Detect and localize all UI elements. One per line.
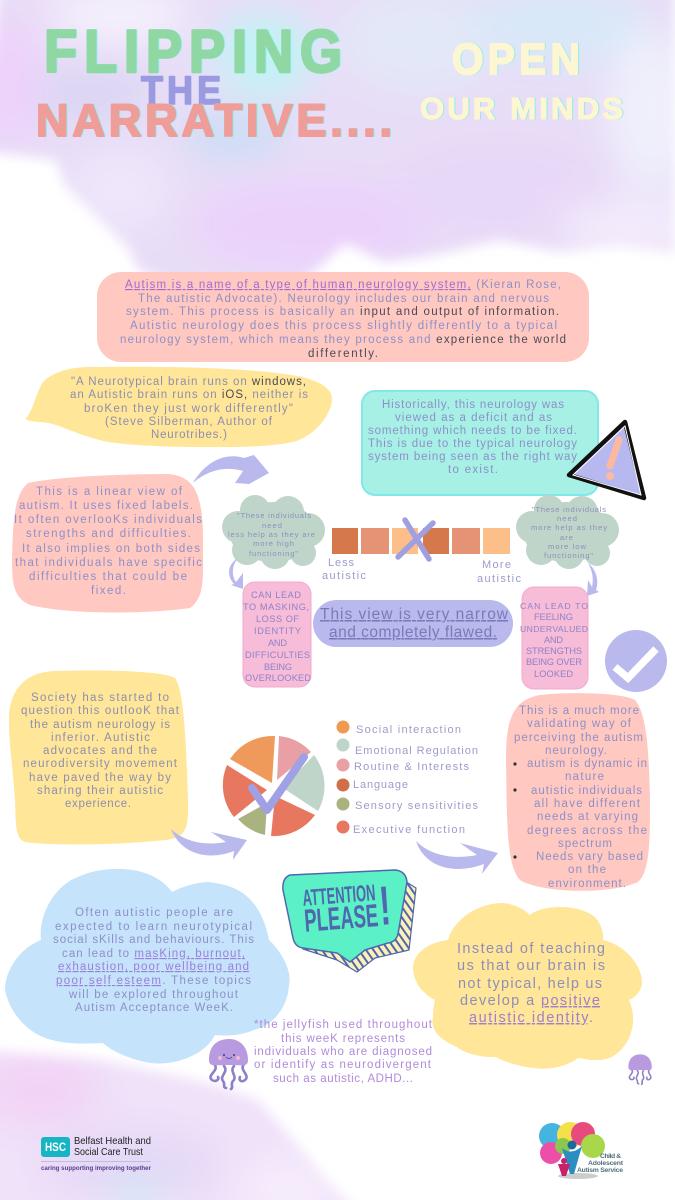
cloud: more help quote: functioning" <box>544 551 593 560</box>
text: jellyfish note: this weeK represents <box>281 1033 405 1045</box>
panel: masking outcome: AND <box>268 638 287 648</box>
label: more autistic <box>477 559 522 585</box>
panel: positive autistic identity: autistic identity. <box>469 1010 593 1026</box>
label: less autistic <box>322 557 366 582</box>
arrow: quote to linear view <box>193 455 269 484</box>
panel: autism definition: The autistic Advocate). Neurology includes our brain and nervous <box>138 293 549 305</box>
panel: undervalued outcome: BEING OVER <box>526 657 582 667</box>
panel: autistic people expected to mask: social sKills and behaviours. This <box>53 934 254 946</box>
panel: quote speech bubble: "A Neurotypical brain runs on windows, <box>71 376 306 388</box>
panel: masking outcome: LOSS OF <box>256 614 299 624</box>
panel: positive autistic identity: develop a positive <box>460 993 600 1009</box>
panel: linear view of autism: autism. It uses fixed labels. <box>19 500 193 512</box>
cloud: less help quote: "These individuals <box>237 511 311 520</box>
cloud: less help quote: need <box>262 521 282 530</box>
panel: validating view: perceiving the autism <box>514 732 643 744</box>
panel: masking outcome: CAN LEAD <box>251 590 301 600</box>
panel: validating view: spectrum <box>558 838 612 850</box>
panel: historical deficit view: to exist. <box>448 464 498 476</box>
subtitle: open our minds <box>420 34 623 126</box>
logo: Child and Adolescent Autism Service <box>539 1122 624 1179</box>
panel: society questions outlook: experience. <box>65 798 131 810</box>
icon: large jellyfish <box>209 1039 248 1089</box>
logo: Child and Adolescent Autism Service: Child & <box>600 1153 621 1160</box>
panel: society questions outlook: neurodiversity movement <box>23 758 178 770</box>
arrow: right cloud to undervalued <box>587 563 599 596</box>
panel: undervalued outcome: UNDERVALUED <box>520 624 588 634</box>
panel: autism definition: Autistic neurology does this process slightly differently to a typical <box>130 320 557 332</box>
logo: Belfast Health and Social Care Trust <box>41 1135 152 1172</box>
label: less autistic: autistic <box>322 570 366 582</box>
panel: society questions outlook: question this outlooK that <box>21 705 180 717</box>
icon: attention please speech bubble <box>283 870 416 972</box>
attention please wording <box>301 874 393 943</box>
panel: autistic people expected to mask <box>5 869 290 1063</box>
panel: validating view: autistic individuals <box>531 785 642 797</box>
logo: Belfast Health and Social Care Trust: HSC <box>45 1142 66 1154</box>
label: more autistic: autistic <box>477 573 522 585</box>
icon: small jellyfish <box>628 1054 652 1084</box>
panel: validating view: autism is dynamic in <box>527 758 647 770</box>
callout: narrow and flawed view: This view is very narrow <box>320 606 509 623</box>
attention please wording: ! <box>377 874 393 937</box>
legend: autism domains: Emotional Regulation <box>355 745 478 757</box>
legend: autism domains: Language <box>353 779 408 791</box>
panel: society questions outlook: the autism neurology is <box>30 719 170 731</box>
panel: masking outcome <box>243 582 311 687</box>
panel: linear view of autism: strengths and difficulties. <box>26 528 191 540</box>
logo: Child and Adolescent Autism Service: Adolescent <box>588 1160 624 1167</box>
bubble body <box>283 870 407 962</box>
panel: validating view: validating way of <box>527 718 632 730</box>
panel: linear view of autism <box>12 474 203 613</box>
arrow: legend to validating panel <box>416 841 498 874</box>
icon: pie check mark <box>252 757 304 810</box>
panel: linear view of autism: that individuals have specific <box>15 557 202 569</box>
cloud: less help quote <box>222 495 325 569</box>
panel: validating view: degrees across the <box>527 825 647 837</box>
panel: validating view: environment. <box>548 878 626 890</box>
panel: positive autistic identity: Instead of teaching <box>457 941 605 957</box>
text: jellyfish note: individuals who are diagnosed <box>254 1046 432 1058</box>
panel: validating view: on the <box>568 864 606 876</box>
panel: quote speech bubble: an Autistic brain runs on iOS, neither is <box>70 389 308 401</box>
cloud: more help quote <box>516 495 619 569</box>
panel: autism definition: Autism is a name of a type of human neurology system, (Kieran Rose, <box>125 279 561 291</box>
legend: autism domains: Executive function <box>353 824 465 836</box>
panel: validating view: nature <box>565 771 604 783</box>
logo: Child and Adolescent Autism Service: Autism Service <box>577 1167 623 1174</box>
logo: Belfast Health and Social Care Trust: Belfast Health and <box>74 1135 151 1147</box>
cloud: less help quote: more high <box>253 539 294 548</box>
panel: autistic people expected to mask: Autism Acceptance WeeK. <box>75 1002 233 1014</box>
panel: linear view of autism: It often overlooKs individuals <box>14 514 202 526</box>
legend: autism domains: Sensory sensitivities <box>355 800 478 812</box>
panel: society questions outlook: advocates and the <box>43 745 157 757</box>
panel: validating view: Needs vary based <box>536 851 643 863</box>
panel: autistic people expected to mask: Often autistic people are <box>75 907 233 919</box>
panel: masking outcome: OVERLOOKED <box>245 673 311 683</box>
panel: society questions outlook: have paved the way by <box>29 772 171 784</box>
panel: undervalued outcome <box>520 587 588 689</box>
panel: historical deficit view: something which needs to be fixed. <box>368 425 577 437</box>
attention please wording: PLEASE <box>303 897 380 939</box>
text: jellyfish note: such as autistic, ADHD... <box>273 1073 413 1085</box>
panel: masking outcome: DIFFICULTIES <box>245 650 310 660</box>
label: more autistic: More <box>482 559 511 571</box>
panel: autism definition <box>97 272 589 362</box>
panel: linear view of autism: difficulties that could be <box>29 571 187 583</box>
panel: historical deficit view: viewed as a deficit and as <box>395 412 552 424</box>
title: flipping the narrative: THE <box>141 69 221 113</box>
callout: narrow and flawed view <box>313 600 513 647</box>
panel: society questions outlook: inferior. Autistic <box>51 732 150 744</box>
attention please wording: ATTENTION <box>302 879 376 911</box>
logo: Belfast Health and Social Care Trust: Social Care Trust <box>74 1146 143 1158</box>
background: bottom-left watercolour wash <box>0 1048 350 1200</box>
subtitle: open our minds: OPEN <box>452 34 580 83</box>
panel: positive autistic identity <box>413 903 642 1069</box>
icon: warning triangle <box>569 422 644 498</box>
title: flipping the narrative: FLIPPING <box>44 18 342 86</box>
panel: historical deficit view: Historically, this neurology was <box>382 399 564 411</box>
legend: autism domains: Routine & Interests <box>354 761 470 773</box>
title: flipping the narrative: NARRATIVE.... <box>36 95 392 146</box>
panel: positive autistic identity: us that our brain is <box>457 958 605 974</box>
panel: masking outcome: IDENTITY <box>254 626 301 636</box>
panel: masking outcome: BEING <box>264 662 292 672</box>
cloud: less help quote: functioning" <box>249 549 298 558</box>
panel: historical deficit view: This is due to the typical neurology <box>368 438 577 450</box>
panel: undervalued outcome: AND <box>544 635 563 645</box>
legend: autism domains: Social interaction <box>356 724 461 736</box>
panel: linear view of autism: fixed. <box>91 585 126 597</box>
panel: validating view: all have different <box>534 798 641 810</box>
icon: check circle <box>605 630 667 692</box>
panel: validating view: This is a much more <box>519 705 639 717</box>
text: jellyfish note <box>254 1019 433 1085</box>
panel: historical deficit view <box>362 391 598 495</box>
panel: positive autistic identity: not typical, help us <box>458 976 602 992</box>
arrow: left cloud to masking <box>229 558 243 589</box>
callout: narrow and flawed view: and completely flawed. <box>329 624 497 641</box>
panel: quote speech bubble: Neurotribes.) <box>151 429 227 441</box>
panel: autism definition: neurology system, which means they process and experience the world <box>120 334 566 346</box>
panel: society questions outlook: Society has started to <box>31 692 169 704</box>
subtitle: open our minds: OUR MINDS <box>420 91 623 126</box>
chart: pie of autism domains <box>223 736 325 836</box>
cloud: more help quote: "These individuals <box>532 505 606 514</box>
panel: autistic people expected to mask: expected to learn neurotypical <box>55 921 252 933</box>
panel: quote speech bubble <box>25 367 332 447</box>
cloud: more help quote: need <box>557 514 577 523</box>
cloud: more help quote: more low <box>548 542 587 551</box>
panel: validating view: neurology. <box>545 745 607 757</box>
logo: Belfast Health and Social Care Trust: caring supporting improving together <box>41 1165 152 1172</box>
text: jellyfish note: or identify as neurodivergent <box>254 1059 432 1071</box>
label: less autistic: Less <box>328 557 354 569</box>
cloud: less help quote: less help as they are <box>228 530 315 539</box>
cloud: more help quote: more help as they <box>531 523 607 532</box>
title: flipping the narrative <box>36 18 392 146</box>
panel: quote speech bubble: (Steve Silberman, Author of <box>105 416 273 428</box>
background: top watercolour wash <box>0 0 675 300</box>
legend: autism domains <box>336 720 478 836</box>
panel: linear view of autism: It also implies on both sides <box>22 543 200 555</box>
panel: autistic people expected to mask: can lead to masKing, burnout, <box>62 948 245 960</box>
text: jellyfish note: *the jellyfish used throughout <box>254 1019 433 1031</box>
panel: autism definition: differently. <box>308 348 378 360</box>
panel: autistic people expected to mask: will be explored throughout <box>68 989 239 1001</box>
panel: autistic people expected to mask: exhaustion, poor wellbeing and <box>58 961 249 973</box>
panel: undervalued outcome: CAN LEAD TO <box>520 601 588 611</box>
panel: validating view: needs at varying <box>537 811 638 823</box>
panel: undervalued outcome: LOOKED <box>534 669 573 679</box>
chart: linear spectrum bar crossed out <box>332 520 510 559</box>
panel: society questions outlook: sharing their autistic <box>37 785 163 797</box>
panel: masking outcome: TO MASKING, <box>243 602 309 612</box>
cloud: more help quote: are <box>560 533 573 542</box>
panel: autism definition: system. This process is basically an input and output of information. <box>126 306 559 318</box>
panel: undervalued outcome: FEELING <box>534 612 573 622</box>
panel: linear view of autism: This is a linear view of <box>36 486 183 498</box>
hatch shadow <box>295 878 416 972</box>
panel: autistic people expected to mask: poor self esteem. These topics <box>56 975 251 987</box>
arrow: society to pie chart <box>171 829 247 860</box>
panel: historical deficit view: system being seen as the right way <box>368 451 577 463</box>
panel: society questions outlook <box>9 671 188 844</box>
panel: undervalued outcome: STRENGTHS <box>526 646 582 656</box>
panel: quote speech bubble: broKen they just work differently" <box>84 403 293 415</box>
panel: validating view <box>506 693 650 891</box>
